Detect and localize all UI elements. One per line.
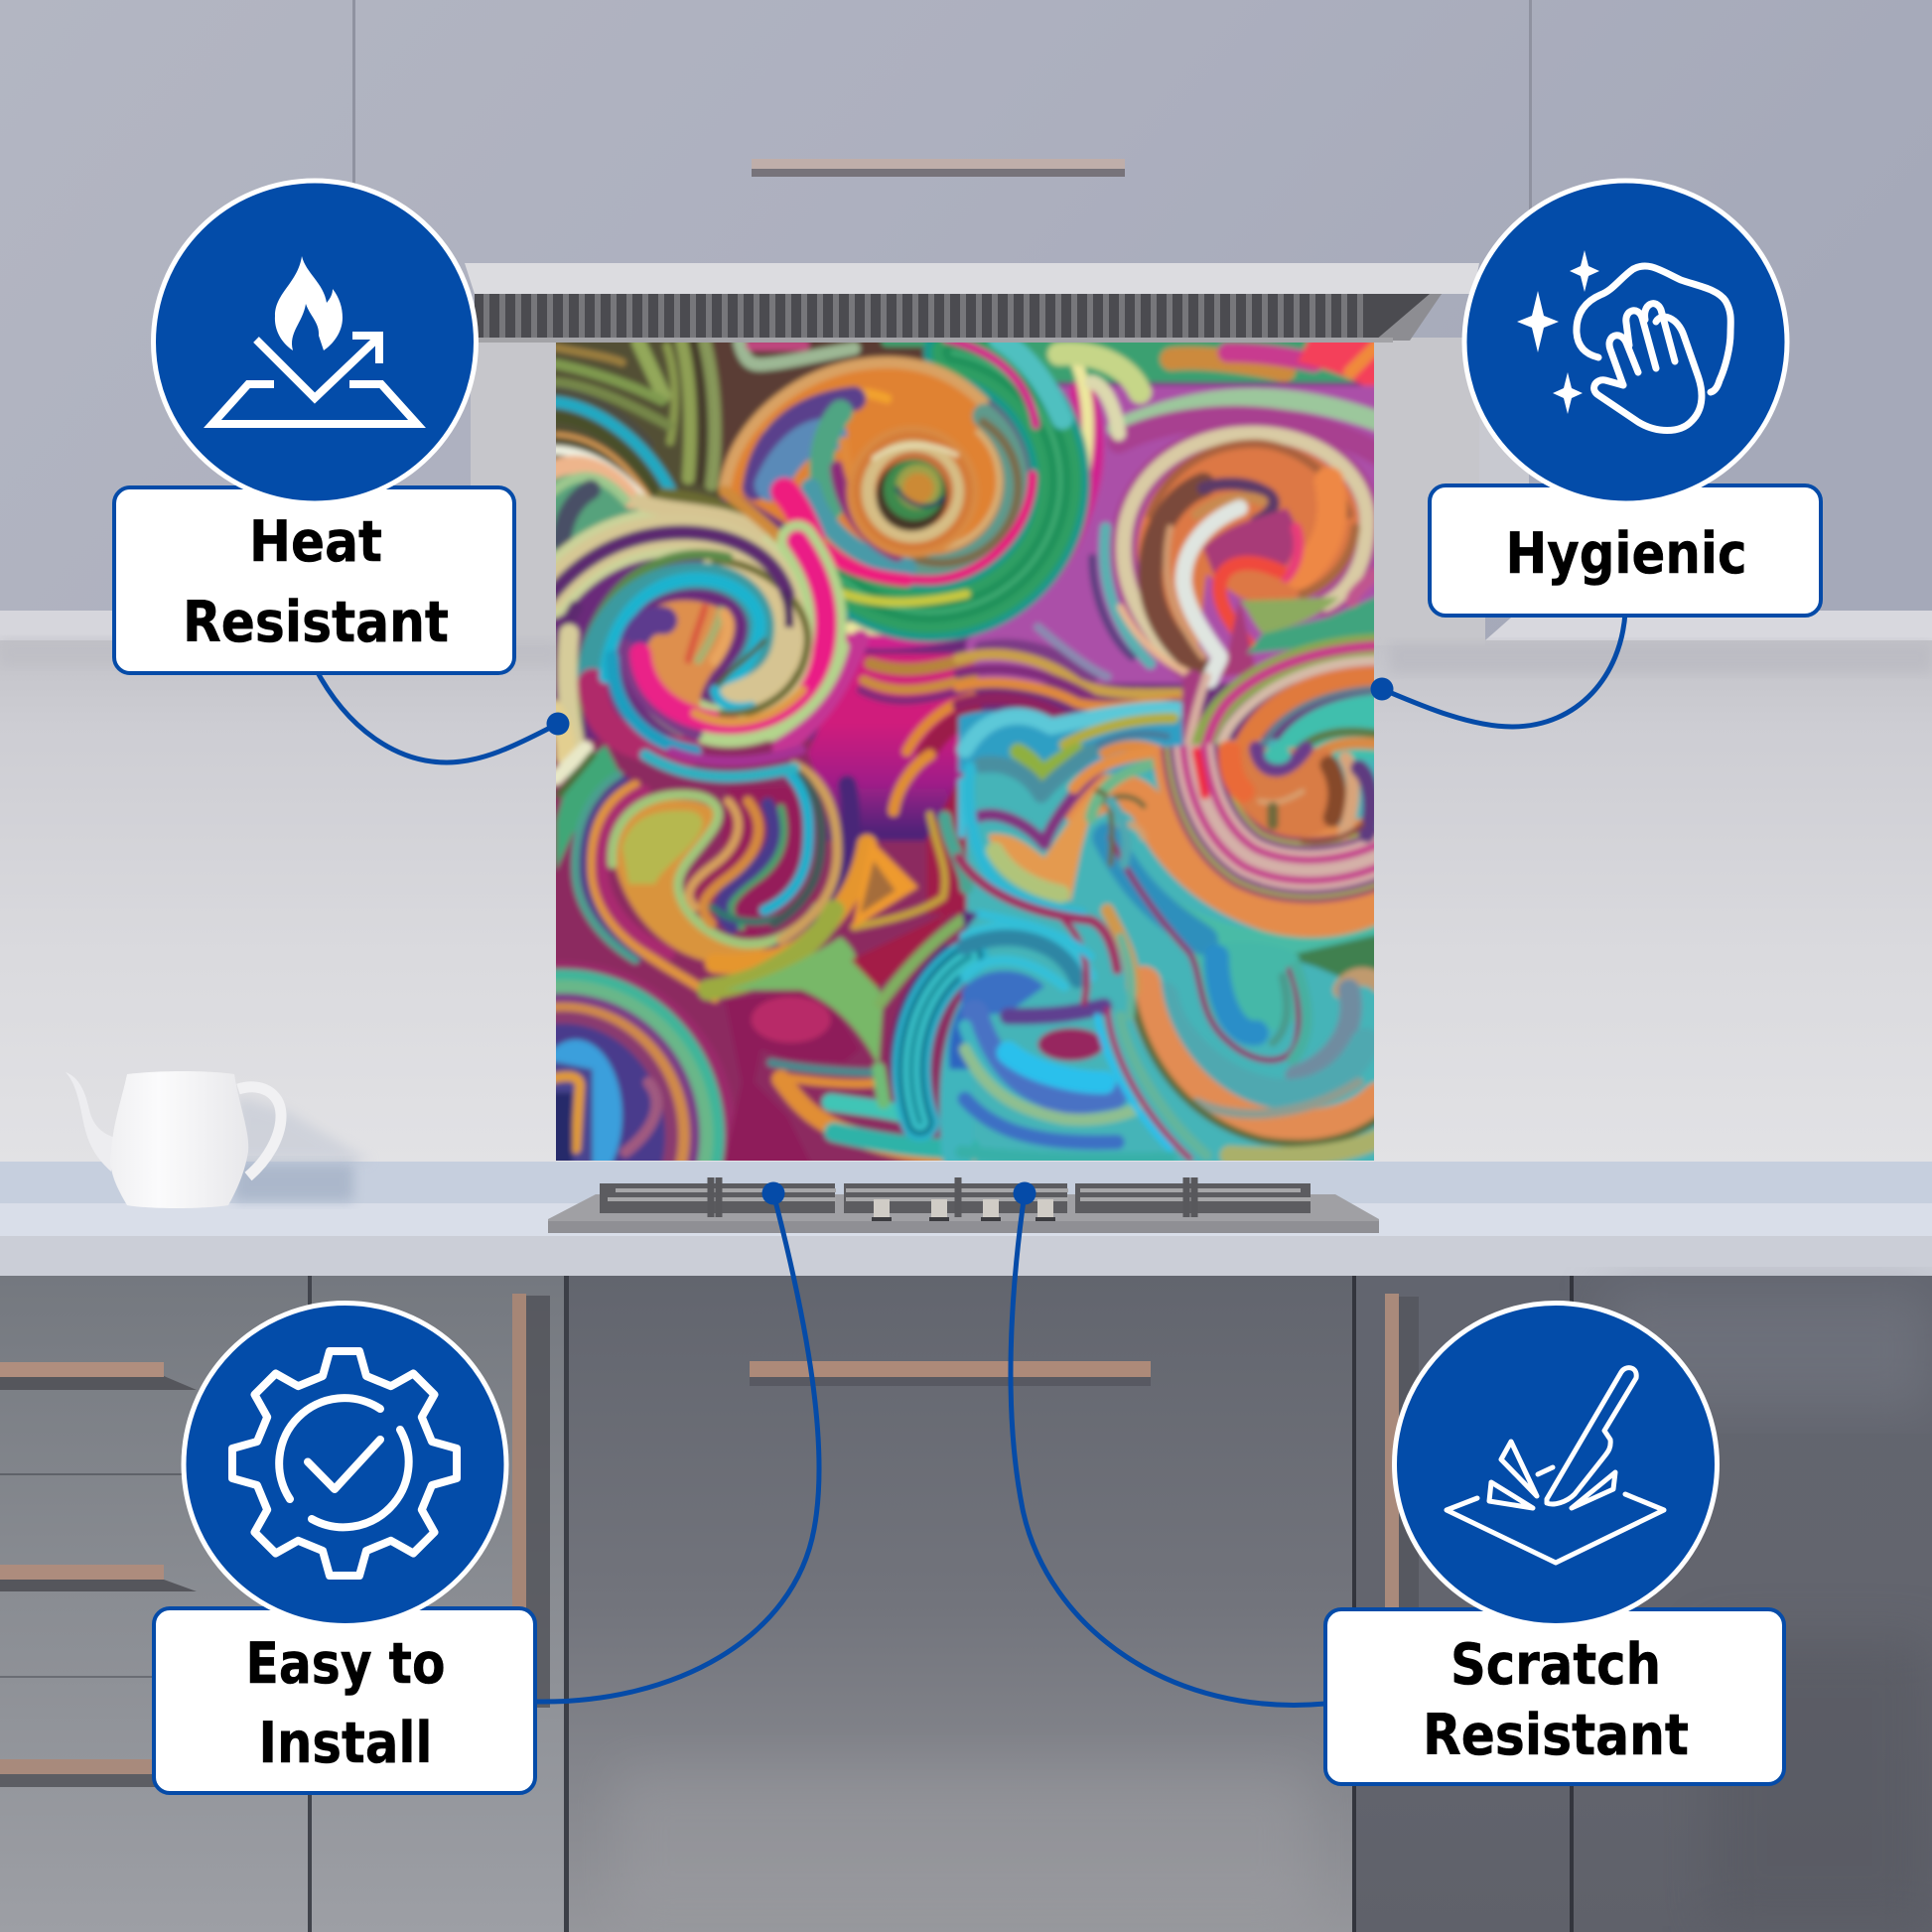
art: lower left swirl and arcs (389, 745, 973, 1310)
art: lower right blue swirl and U bands (958, 745, 1389, 1160)
art: top centre rings (831, 330, 1397, 683)
left cabinet lip (0, 611, 558, 666)
art: top centre inner swirl (725, 362, 1033, 580)
art: top-left stripes (543, 330, 970, 588)
label box with text: Resistant (1423, 1703, 1689, 1768)
label box with text: Easy to (246, 1631, 445, 1697)
label box with text (114, 487, 514, 673)
connector: hygienic (1370, 613, 1625, 727)
teapot shadow (233, 1097, 372, 1201)
connector: scratch resistant (1011, 1181, 1325, 1705)
label box with text (1325, 1609, 1784, 1784)
tile wall (0, 640, 1932, 1167)
art: centre magenta and stripes (781, 638, 973, 839)
right vertical handle (1385, 1294, 1419, 1614)
art: middle stripes upper right (958, 627, 1382, 772)
label box with text: Scratch (1450, 1632, 1661, 1698)
label box with text: Hygienic (1505, 521, 1747, 587)
label box with text: Resistant (183, 590, 449, 655)
icon: flame on surface (153, 181, 477, 503)
label box with text (154, 1608, 535, 1793)
connector: easy to install (537, 1181, 819, 1702)
art: base colour fields (543, 330, 1390, 1176)
left vertical handle (512, 1294, 550, 1708)
art: left swirl (549, 491, 841, 757)
icon: gear with check mark (184, 1303, 506, 1626)
hood vent (475, 294, 1442, 343)
counter back (0, 1162, 1932, 1203)
teapot (66, 1071, 281, 1208)
gas cooktop (548, 1177, 1379, 1233)
base cabinets (0, 1276, 1932, 1932)
callout: heat resistant (114, 181, 514, 673)
wall behind hood (471, 338, 1485, 645)
right cabinet lip (1390, 611, 1932, 673)
label box with text (1430, 485, 1821, 616)
upper cabinets (0, 0, 1932, 645)
label box with text: Heat (249, 509, 382, 575)
wall cabinet corner (1479, 338, 1529, 616)
center drawer handle (750, 1361, 1151, 1386)
panel: swirl artwork splashback (556, 343, 1374, 1161)
art: right top swirl (1092, 434, 1382, 680)
label box with text: Install (258, 1711, 433, 1776)
icon: hand wiping with sparkles (1464, 181, 1787, 503)
drawer handles (0, 1362, 197, 1787)
hood front (465, 263, 1479, 294)
counter top (0, 1203, 1932, 1236)
counter edge (0, 1236, 1932, 1276)
connector: heat resistant (315, 667, 570, 762)
callout: easy to install (154, 1303, 535, 1793)
callout: hygienic (1430, 181, 1821, 616)
icon: knife scratching surface (1394, 1303, 1718, 1626)
upper cabinet handle (752, 159, 1125, 177)
callout: scratch resistant (1325, 1303, 1784, 1784)
